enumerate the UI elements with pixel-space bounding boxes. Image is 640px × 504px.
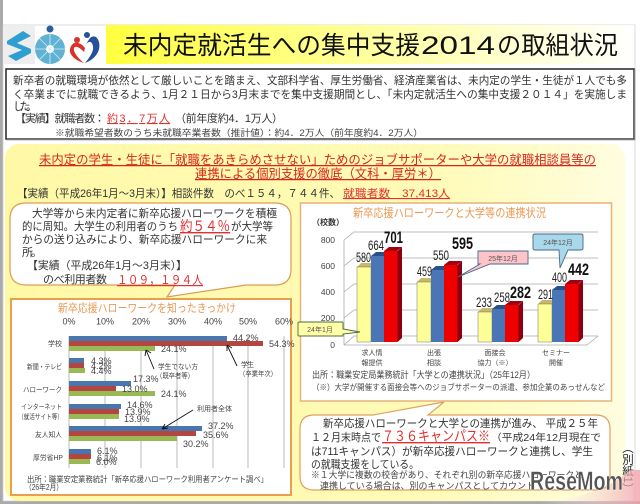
value labels: 4.2% (91, 361, 112, 371)
annotations with arrows: 学生でない方 (158, 362, 198, 371)
value labels: 14.6% (127, 400, 153, 410)
callout: 736 campuses (300, 402, 610, 491)
category labels (362, 348, 570, 367)
value labels: 17.3% (133, 374, 159, 384)
axis labels: 50% (239, 316, 257, 326)
y axis: 0 (330, 340, 335, 350)
value labels: 4.4% (91, 366, 112, 376)
callout: left usage (10, 203, 291, 297)
callout: 24年12月 (533, 234, 583, 268)
category labels: 報提供 (362, 358, 382, 367)
chart source (312, 369, 605, 392)
results line: 【実績（平成26年1月～3月末）】相談件数 のべ１５４，７４４件、 (17, 186, 340, 200)
category labels: 協力（※） (478, 358, 512, 367)
value labels: 4.3% (91, 356, 112, 366)
category labels: （就活サイト等） (18, 412, 63, 421)
axis labels: 30% (168, 316, 186, 326)
panel: summary text box: 【実績】就職者数： (15, 111, 105, 125)
y axis (312, 217, 598, 350)
category labels: セミナー (542, 349, 570, 357)
axis labels: 10% (96, 316, 114, 326)
value labels: 24.1% (161, 389, 187, 399)
value labels: 44.2% (233, 333, 259, 343)
panel: summary text box: ※就職希望者数のうち未就職卒業者数（推計値）：約4．2万人（前年度約4．2万人） (55, 127, 423, 138)
panel: summary text box: （前年度約4．1万人） (175, 111, 283, 125)
callout: 736 campuses: ７３６キャンパス※ (382, 428, 490, 444)
chart source: 出所：職業安定業務統計「新卒応援ハローワーク利用者アンケート調べ」 (27, 474, 268, 484)
bar value labels: 580 (356, 249, 371, 265)
icon: ministry logos (3, 26, 99, 64)
annotations with arrows: 学生 (241, 360, 254, 369)
axis labels: 40% (204, 316, 222, 326)
annotations with arrows (145, 345, 277, 429)
callout: 25年12月: 25年12月 (488, 254, 518, 263)
callout: 736 campuses: （平成24年12月現在で (491, 431, 601, 444)
title: 未内定就活生への集中支援 (123, 32, 420, 60)
bar value labels: 664 (368, 237, 384, 253)
value labels: 13.9% (125, 407, 151, 417)
callout: left usage: 約５４％ (180, 218, 230, 234)
annotations with arrows: （卒業年次） (239, 369, 277, 378)
callout: left usage: 的に周知。大学生の利用者のうち (22, 219, 178, 233)
value labels: 13.9% (124, 414, 150, 424)
value labels: 54.3% (269, 339, 295, 349)
callout: 736 campuses: ※１大学に複数の校舎があり、それぞれ別の新卒応援ハローワークと (311, 469, 583, 480)
callout: left usage: が大学等 (231, 219, 273, 233)
axis labels: 0% (62, 316, 76, 326)
callout: left usage: 大学等から未内定者に新卒応援ハローワークを積極 (32, 206, 277, 220)
panel: summary text box: く卒業までに就職できるよう、1月２１日から3月末までを集中支援期間とし、「未内定就活生への集中支援２０１４」を実施しま (13, 87, 627, 101)
category labels: 求人情 (362, 348, 382, 357)
heading: support policy: 未内定の学生・生徒に「就職をあきらめさせない」ためのジョブサポーターや大学の就職相談員等の (39, 152, 596, 167)
callout: left usage: 所。 (22, 245, 42, 259)
panel: summary text box: 約3．7万人 (107, 111, 170, 125)
category labels: 面接会 (484, 348, 506, 357)
category labels: 友人知人 (35, 430, 62, 439)
bar value labels (356, 228, 589, 310)
panel: right 3D bar chart cooperation (298, 203, 612, 401)
value labels: 30.2% (183, 439, 209, 449)
bar value labels: 459 (417, 263, 432, 279)
axis labels (62, 316, 293, 326)
panel: yellow support section (5, 144, 625, 501)
category labels: 出張 (427, 348, 441, 357)
value labels: 37.2% (208, 421, 234, 431)
value labels: 35.6% (203, 430, 229, 440)
category labels: ハローワーク (23, 386, 62, 394)
callout: 736 campuses: 連携している場合は、別のキャンパスとしてカウント (320, 480, 535, 491)
value labels: 13.0% (122, 384, 148, 394)
chart source: 出所：職業安定局業務統計「大学との連携状況」（25年12月） (312, 369, 535, 380)
value labels: 24.1% (161, 344, 187, 354)
bar value labels: 282 (510, 283, 531, 302)
value labels: 6.1% (97, 446, 118, 456)
panel: summary text box: した。 (13, 100, 37, 113)
bar value labels: 291 (538, 286, 553, 302)
category labels: 厚労省HP (33, 453, 63, 462)
y axis: 800 (321, 235, 335, 245)
value labels: 6.0% (96, 457, 117, 467)
callout: 736 campuses: は711キャンパス）が新卒応援ハローワークと連携し、学生 (311, 444, 593, 458)
axis labels: 20% (132, 316, 150, 326)
chart source: （26年2月） (25, 482, 63, 492)
results line (17, 186, 450, 200)
y axis: 200 (321, 313, 335, 323)
callout: 25年12月 (458, 251, 528, 277)
bars (69, 336, 263, 464)
title (106, 25, 634, 64)
callout: left usage: 【実績（平成26年1月～3月末）】 (27, 258, 187, 272)
bar value labels: 595 (452, 234, 473, 253)
bars (357, 247, 583, 342)
value labels (91, 333, 295, 467)
axis labels: 60% (275, 316, 293, 326)
callout: left usage: のべ利用者数 (43, 273, 107, 286)
bar value labels: 400 (552, 269, 567, 285)
bar value labels: 550 (433, 247, 449, 263)
chart title: 新卒応援ハローワークと大学等の連携状況 (353, 205, 546, 220)
callout: left usage: １０９，１９４人 (117, 273, 203, 287)
chart source (25, 474, 268, 492)
category labels: 新聞・テレビ (27, 362, 62, 371)
callout: 24年1月: 24年1月 (307, 325, 333, 334)
bar value labels: 701 (384, 228, 403, 247)
annex label: （別紙1） (621, 442, 634, 494)
category labels (18, 339, 63, 462)
panel: summary text box: 新卒者の就職環境が依然として厳しいことを踏まえ、文部科学省、厚生労働省、経済産業省は、未内定の学生・生徒が１人でも多 (13, 73, 627, 87)
category labels: 学校 (48, 339, 62, 348)
title: 2014 (421, 32, 495, 60)
callout: 736 campuses: １２月末時点で (311, 430, 381, 444)
heading: support policy (39, 152, 596, 181)
panel: summary text box (6, 69, 634, 140)
chart source: （※）大学が開催する面接会等へのジョブサポーターの派遣、参加企業のあっせんなど (312, 382, 605, 392)
callout: 736 campuses: 新卒応援ハローワークと大学との連携が進み、 平成２５年 (323, 416, 598, 430)
y axis: 400 (321, 287, 335, 297)
callout: 24年12月: 24年12月 (543, 238, 573, 247)
results line: 就職者数 37,413人 (343, 186, 450, 200)
callout: 736 campuses: の就職支援をしている。 (311, 457, 419, 471)
chart title: 新卒応援ハローワークを知ったきっかけ (58, 301, 236, 315)
heading: support policy: 連携による個別支援の徹底（文科・厚労＊） (195, 166, 441, 181)
callout: left usage: からの送り込みにより、新卒応援ハローワークに来 (22, 232, 267, 246)
category labels: インターネット (21, 402, 62, 411)
title: の取組状況 (497, 32, 618, 60)
value labels: 6.1% (97, 453, 118, 463)
bar value labels: 442 (568, 260, 589, 279)
annotations with arrows: （既卒者等） (156, 371, 194, 380)
annotations with arrows: 利用者全体 (197, 404, 232, 413)
callout: 24年1月 (298, 322, 360, 336)
bar value labels: 233 (476, 294, 492, 310)
panel: left bar chart how users learned (11, 299, 295, 495)
bar value labels: 258 (494, 289, 510, 305)
category labels: 開催 (549, 358, 563, 367)
y axis: （校数） (312, 217, 344, 227)
y axis: 600 (321, 261, 335, 271)
category labels: 相談 (427, 358, 441, 367)
